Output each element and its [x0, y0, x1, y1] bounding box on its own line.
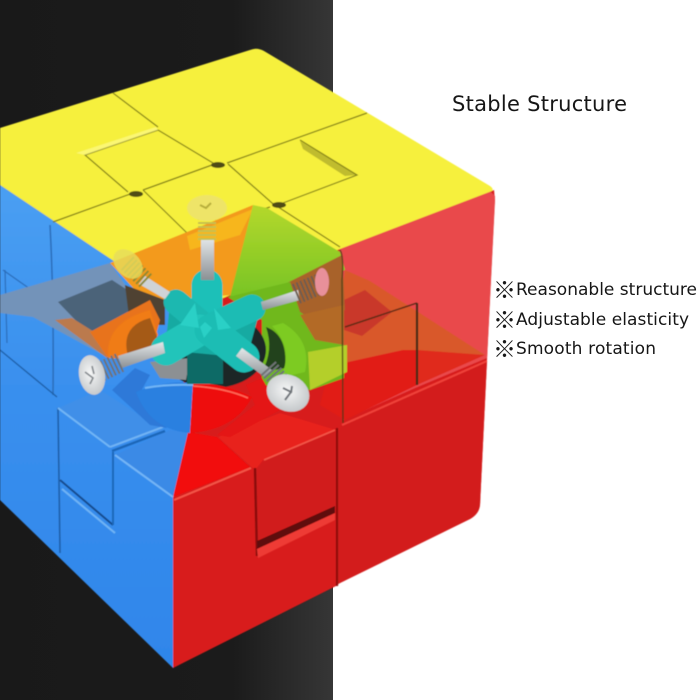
cube: blue left face — [0, 185, 190, 668]
window frame line — [340, 250, 343, 423]
feature: adjustable elasticity: Adjustable elasticity — [516, 310, 689, 330]
feature: adjustable elasticity: ※ — [493, 301, 516, 335]
feature: reasonable structure — [493, 271, 697, 305]
feature: adjustable elasticity — [493, 301, 689, 335]
window: green back wall — [228, 282, 344, 390]
window: dark zone under orange wedge — [125, 285, 165, 325]
screw: upper right — [261, 268, 329, 310]
dark background panel — [0, 0, 333, 700]
screw: top — [187, 195, 227, 280]
window: yellow-green stripe — [308, 345, 347, 390]
cube illustration — [0, 49, 495, 668]
heading: Stable Structure: Stable Structure — [452, 92, 627, 116]
window: grey-blue left band — [0, 263, 130, 357]
cube: red right face — [173, 189, 495, 668]
blue support left of the bowl — [112, 368, 167, 428]
seam junction shadows — [129, 162, 286, 208]
cube: yellow top face — [0, 49, 493, 312]
feature: reasonable structure: ※ — [493, 271, 516, 305]
window: red right section — [330, 270, 485, 366]
dark cavity behind the core — [160, 312, 266, 388]
window: orange cap — [90, 300, 160, 360]
teal core — [165, 285, 260, 384]
red support right of the bowl — [217, 378, 280, 437]
top face seams — [53, 93, 367, 247]
blue face lower blocks — [0, 225, 188, 553]
silver inner wedge — [150, 358, 190, 380]
translucent window over the core — [0, 205, 485, 423]
window: brown zone right of the upper green — [287, 255, 345, 320]
feature: smooth rotation: ※ — [493, 330, 516, 364]
hemisphere bowl — [136, 382, 252, 433]
feature: reasonable structure: Reasonable structure — [516, 280, 697, 300]
screw: lower right — [236, 348, 316, 419]
window: green wedge — [230, 205, 345, 297]
window: orange wedge — [110, 205, 253, 300]
window: green cap — [262, 323, 306, 378]
screw: upper left — [107, 243, 170, 299]
feature list — [493, 271, 697, 364]
screw: lower left — [76, 342, 165, 397]
feature: smooth rotation: Smooth rotation — [516, 339, 656, 359]
feature: smooth rotation — [493, 330, 656, 364]
